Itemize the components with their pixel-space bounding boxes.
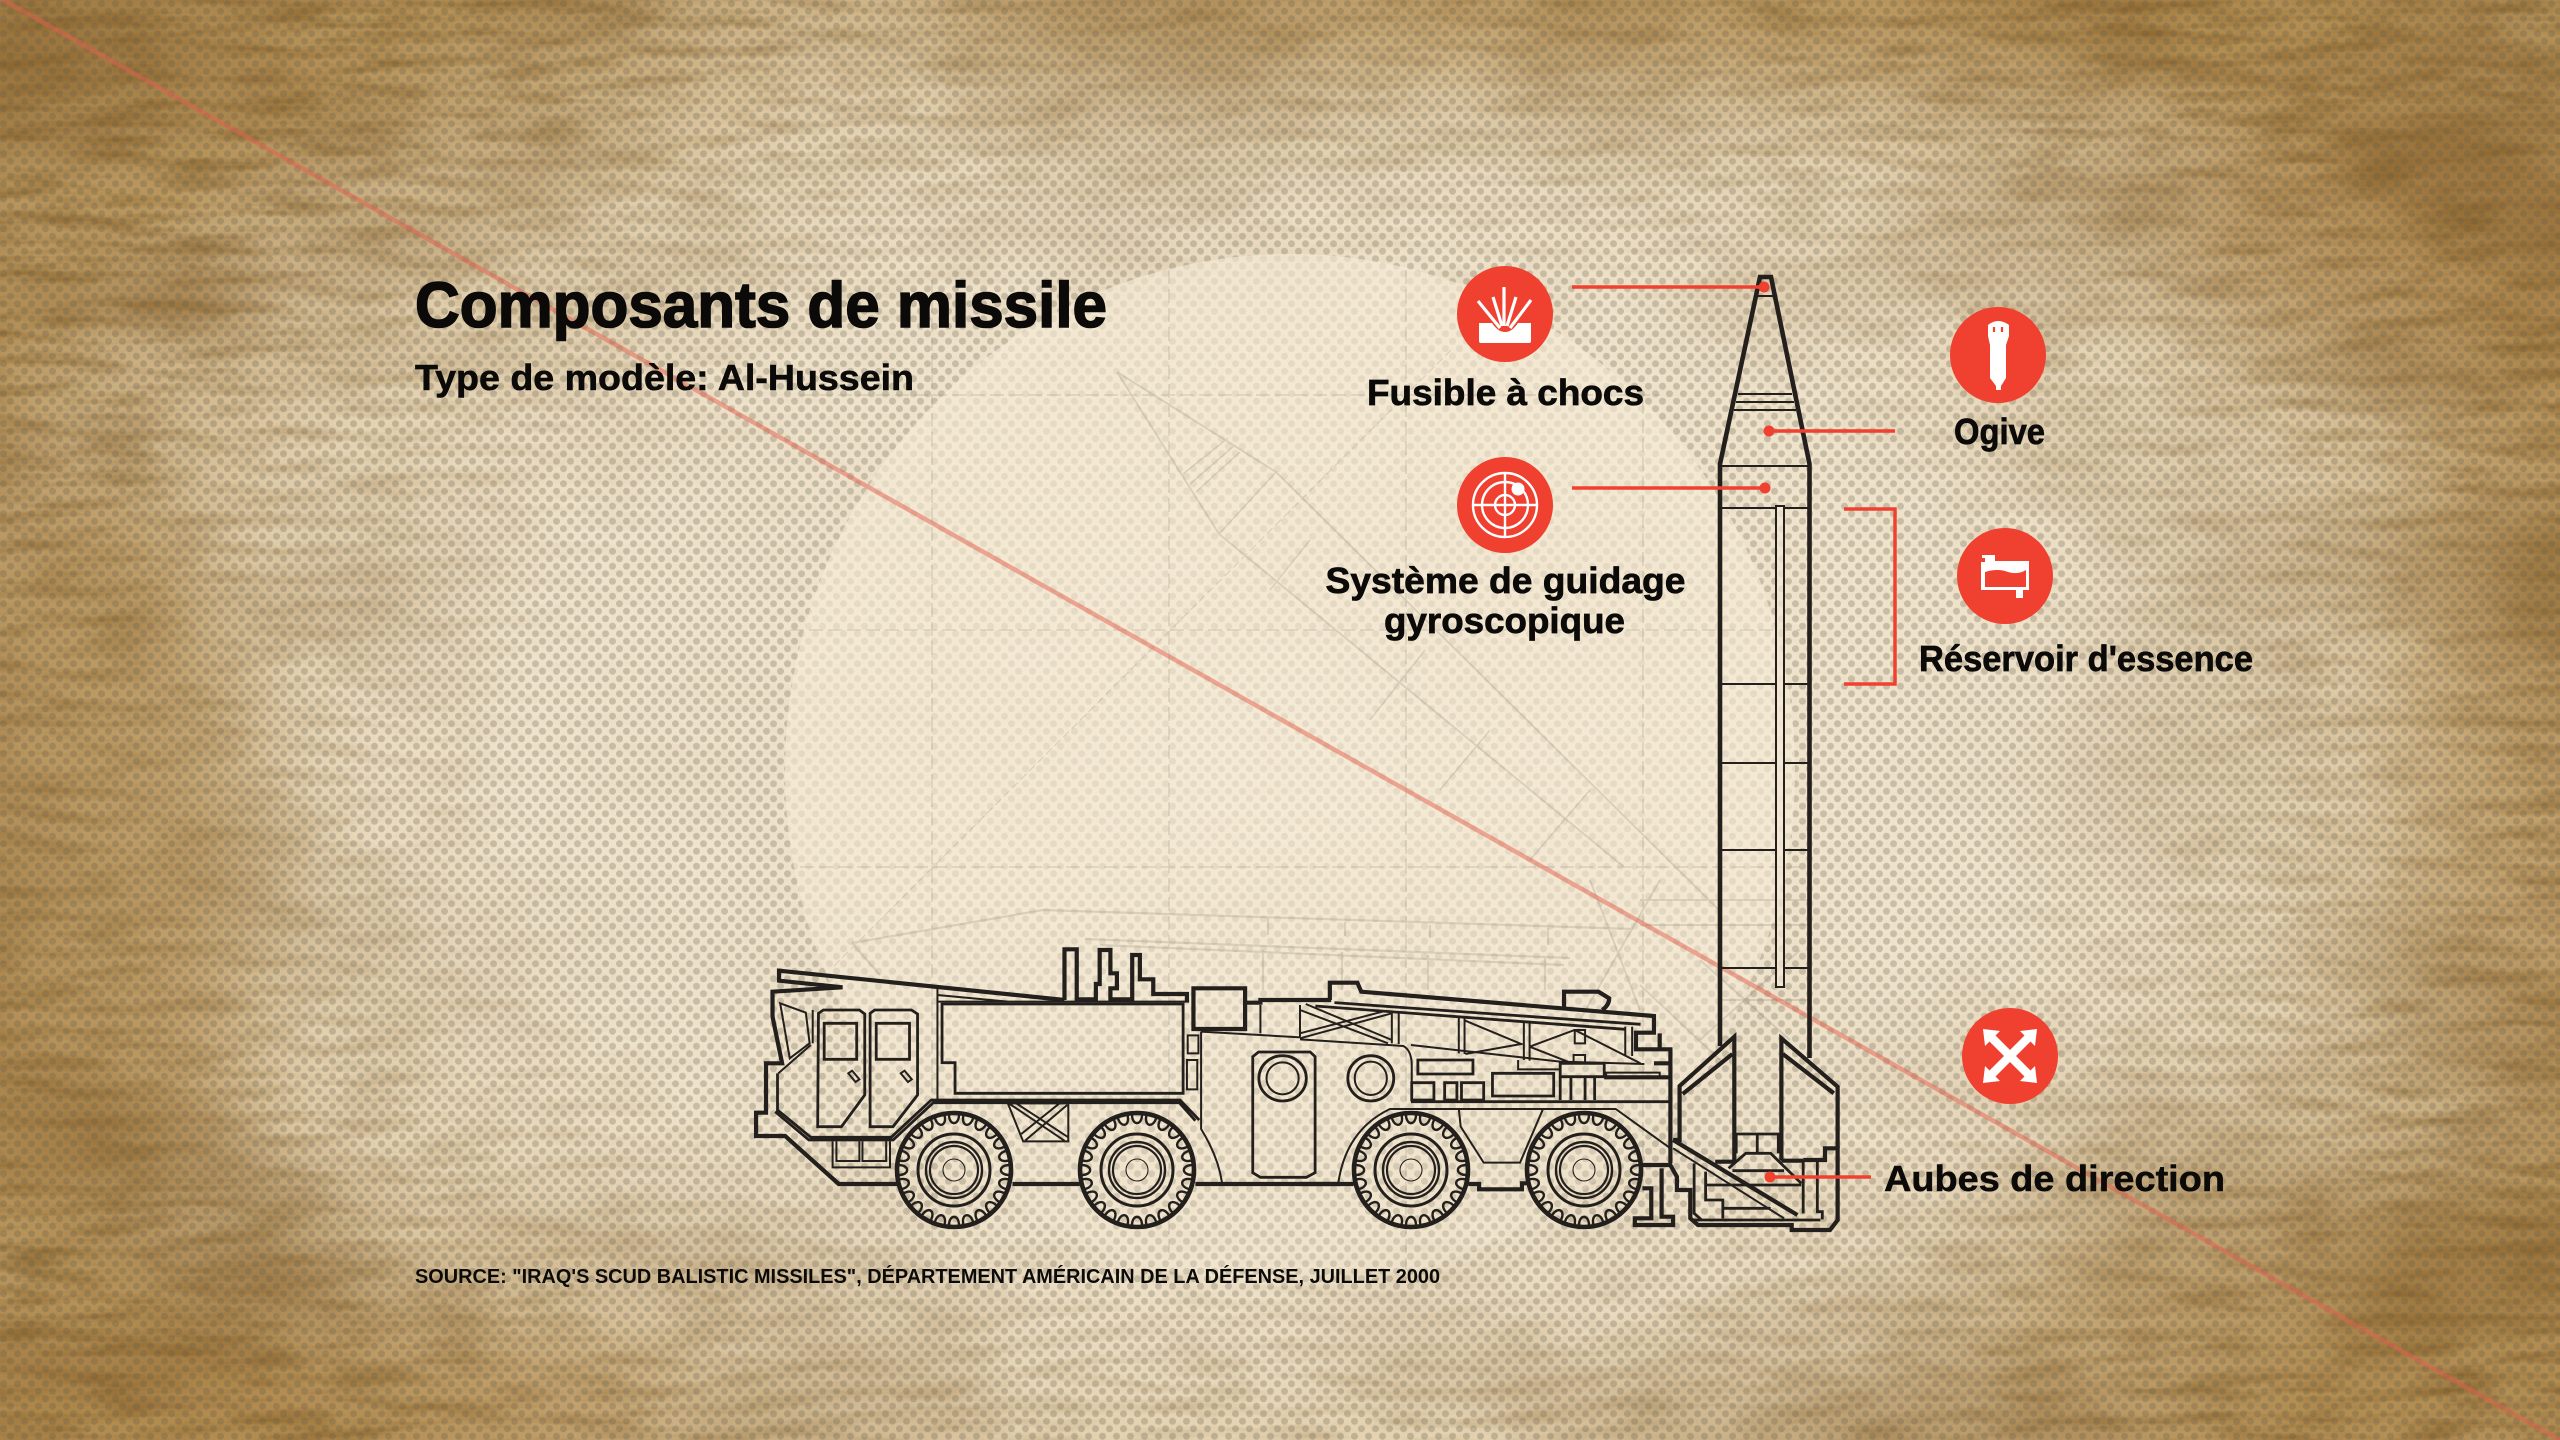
leader line: warhead bbox=[1764, 426, 1895, 436]
illustration: missile launcher truck bbox=[756, 949, 1838, 1230]
label: shock fuse: Fusible à chocs bbox=[1367, 372, 1644, 413]
truck: cab and cargo bbox=[756, 949, 1340, 1184]
callout: fuel tank bbox=[1844, 509, 2253, 684]
label: warhead: Ogive bbox=[1954, 411, 2045, 452]
wheels bbox=[897, 1113, 1641, 1227]
subtitle: Type de modèle: Al-Hussein bbox=[415, 357, 914, 398]
leader line: steering vanes bbox=[1764, 1172, 1871, 1182]
callout: guidance system bbox=[1326, 457, 1770, 641]
illustration: missile bbox=[1719, 277, 1810, 1058]
label: steering vanes: Aubes de direction bbox=[1884, 1158, 2225, 1199]
bracket: fuel tank bbox=[1844, 509, 1895, 684]
label: guidance system bbox=[1326, 560, 1686, 641]
title: Composants de missile bbox=[415, 269, 1107, 341]
background: pale circle bbox=[785, 254, 1795, 1286]
label: guidance system: Système de guidage bbox=[1326, 560, 1686, 601]
launcher base and fins bbox=[1669, 1037, 1838, 1230]
leader line: shock fuse bbox=[1572, 282, 1770, 292]
icon: warhead bbox=[1950, 307, 2046, 403]
truck: erector and rear chassis bbox=[1300, 983, 1673, 1225]
icon: gyroscopic radar bbox=[1457, 457, 1553, 553]
source note: SOURCE: "IRAQ'S SCUD BALISTIC MISSILES", DÉPARTEMENT AMÉRICAIN DE LA DÉFENSE, JUILLET 2000 bbox=[415, 1265, 1440, 1288]
label: guidance system: gyroscopique bbox=[1384, 600, 1625, 641]
ghost sketch: blueprint of raised missile and launcher bbox=[790, 270, 1810, 1270]
label: fuel tank: Réservoir d'essence bbox=[1919, 638, 2253, 679]
icon: shock fuse bbox=[1457, 266, 1553, 362]
icon: four diagonal arrows bbox=[1962, 1008, 2058, 1104]
callout: shock fuse bbox=[1367, 266, 1770, 413]
icon: fuel tank bbox=[1957, 528, 2053, 624]
callout: warhead bbox=[1764, 307, 2046, 452]
leader line: guidance system bbox=[1572, 482, 1770, 494]
callout: steering vanes bbox=[1764, 1008, 2225, 1199]
